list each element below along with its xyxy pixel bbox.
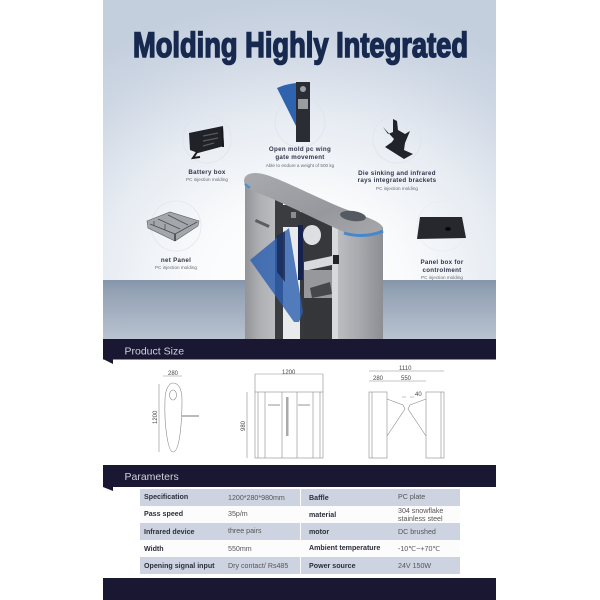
row: pass speed [144, 507, 443, 523]
label: side view dimensions: 280 [373, 376, 384, 382]
label: open mold pc wing: Able to endure a weight of 500 kg [266, 163, 335, 168]
row: pass speed: 35p/m [228, 510, 248, 518]
section band: parameters: Parameters [124, 471, 179, 483]
footer band [103, 578, 496, 600]
row: pass speed: stainless steel [398, 515, 443, 523]
label: side view dimensions: 550 [401, 376, 412, 382]
row: opening signal input: Dry contact/ Rs485 [228, 562, 288, 570]
row: specification: PC plate [398, 493, 425, 501]
label: top view dimensions: 280 [168, 371, 179, 377]
label: front view dimensions [241, 370, 296, 431]
section band: product size [103, 339, 496, 364]
row: specification: Baffle [309, 494, 329, 502]
row: specification: 1200*280*980mm [228, 494, 285, 502]
label: die sinking brackets: PC injection molding [376, 186, 418, 191]
label: open mold pc wing: Open mold pc wing [269, 146, 331, 153]
row: width: Width [144, 545, 164, 553]
section band: product size: Product Size [124, 346, 184, 358]
drawing: top view [153, 371, 199, 452]
row: infrared device: Infrared device [144, 528, 195, 536]
row: infrared device [144, 527, 436, 536]
row: width [144, 544, 440, 553]
hero panel [103, 0, 496, 339]
row: width: -10℃~+70℃ [398, 545, 440, 553]
icon: battery box [183, 115, 231, 163]
icon: control panel box [417, 201, 467, 251]
label: side view dimensions: 1110 [399, 366, 412, 372]
drawing: front view [241, 370, 323, 458]
label: panel box for controlment: Panel box for [420, 259, 464, 266]
section band: parameters [103, 465, 496, 491]
label: side view dimensions [373, 366, 422, 398]
drawing: side view [369, 366, 444, 458]
row: width: 550mm [228, 545, 252, 553]
label: panel box for controlment: PC injection molding [421, 275, 463, 280]
label: net panel: PC injection molding [155, 265, 197, 270]
row: specification [144, 493, 425, 502]
label: battery box: Battery box [188, 169, 226, 176]
row: infrared device: three pairs [228, 527, 262, 535]
label: front view dimensions: 980 [241, 420, 247, 431]
label: battery box: PC injection molding [186, 177, 228, 182]
row: opening signal input [144, 562, 431, 570]
row: specification: Specification [144, 493, 188, 501]
title: Molding Highly Integrated [133, 26, 468, 65]
label: die sinking brackets: Die sinking and infrared [358, 170, 436, 177]
label: front view dimensions: 1200 [282, 370, 296, 376]
icon: open mold wing gate movement [275, 82, 325, 147]
label: side view dimensions: 40 [415, 392, 422, 398]
row: infrared device: DC brushed [398, 528, 436, 536]
row: pass speed: 304 snowflake [398, 507, 443, 515]
label: die sinking brackets: rays integrated brackets [358, 177, 437, 184]
icon: net panel [147, 201, 201, 251]
row: pass speed: material [309, 511, 336, 519]
row: width: Ambient temperature [309, 544, 380, 552]
label: top view dimensions [153, 371, 179, 424]
label: net panel: net Panel [161, 257, 191, 264]
parameters table [140, 489, 460, 574]
row: opening signal input: Power source [309, 562, 356, 570]
row: opening signal input: 24V 150W [398, 562, 431, 570]
label: open mold pc wing: gate movement [275, 154, 325, 161]
row: infrared device: motor [309, 528, 329, 536]
icon: die sinking bracket [373, 115, 421, 163]
turnstile gate [244, 173, 383, 339]
label: top view dimensions: 1200 [153, 410, 159, 424]
label: panel box for controlment: controlment [422, 267, 462, 274]
row: pass speed: Pass speed [144, 510, 183, 518]
row: opening signal input: Opening signal input [144, 562, 215, 570]
